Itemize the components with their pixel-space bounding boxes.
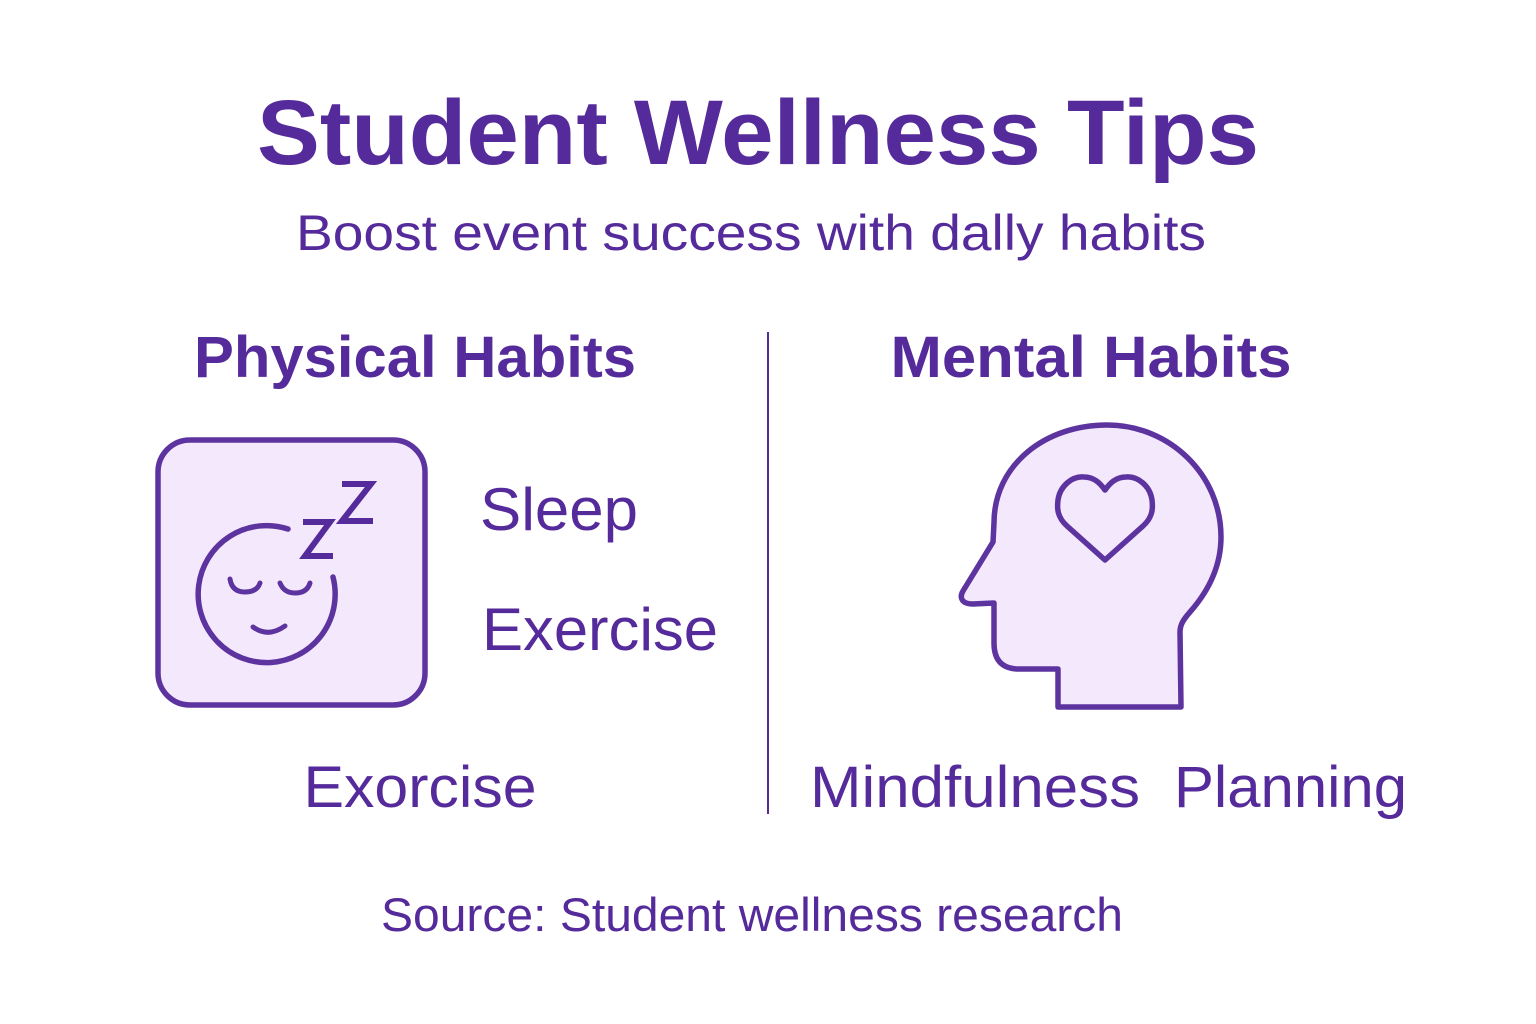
- label: mindfulness: Mindfulness: [810, 755, 1140, 820]
- icon: head with heart: [961, 425, 1221, 707]
- label: planning: Planning: [1174, 755, 1407, 820]
- icon: sleeping face: [158, 440, 425, 705]
- divider: [767, 332, 769, 814]
- label: exercise right: Exercise: [482, 596, 718, 663]
- heading: physical habits: Physical Habits: [194, 325, 636, 390]
- heading: mental habits: Mental Habits: [890, 325, 1292, 390]
- label: exorcise: Exorcise: [304, 755, 536, 820]
- source note: Source: Student wellness research: [381, 888, 1123, 941]
- label: sleep: Sleep: [480, 476, 638, 543]
- title: Student Wellness Tips: [257, 82, 1259, 184]
- subtitle: Boost event success with dally habits: [296, 205, 1206, 261]
